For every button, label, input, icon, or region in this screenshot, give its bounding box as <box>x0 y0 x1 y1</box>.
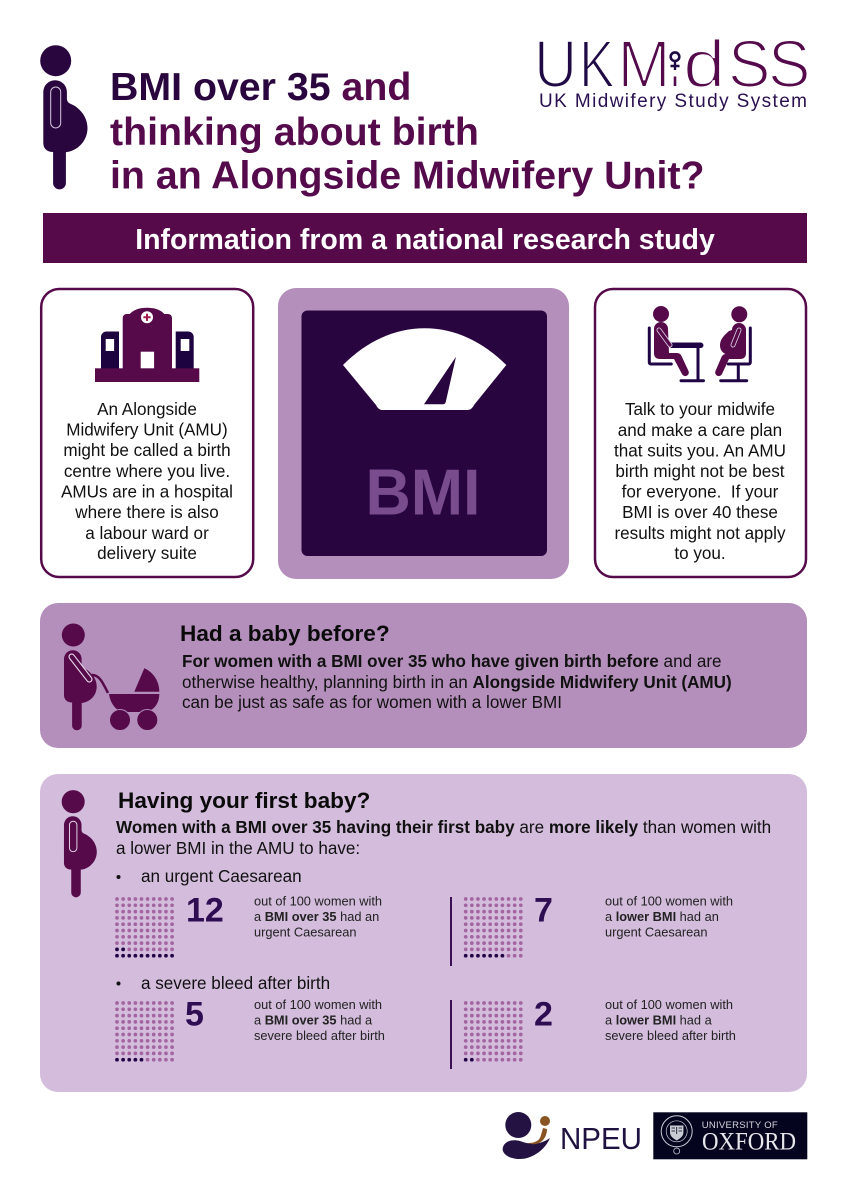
text: had a baby before: For women with a BMI over 35 who have given birth before and are <box>182 652 722 671</box>
caption <box>254 997 385 1043</box>
stat: 5 out of 100 with BMI over 35 severe bleed <box>117 996 385 1060</box>
text: AMU description: An Alongside <box>97 400 197 419</box>
title <box>110 65 705 198</box>
dot grid: 2 of 100 <box>466 1003 521 1060</box>
title: in an Alongside Midwifery Unit? <box>110 154 705 198</box>
logo: UKMidSS: K <box>579 26 615 101</box>
icon: pregnant woman <box>62 790 97 897</box>
title: thinking about birth <box>110 110 479 154</box>
icon: dial needle <box>424 357 456 404</box>
logo: UKMidSS: UK Midwifery Study System <box>539 91 808 112</box>
panel: had a baby before <box>40 603 807 748</box>
text: talk to your midwife: BMI is over 40 these <box>622 503 778 522</box>
caption: urgent Caesarean <box>605 924 707 940</box>
logo: UKMidSS: d <box>683 27 725 102</box>
icon: pregnant woman <box>40 45 88 189</box>
text: talk to your midwife <box>614 400 786 563</box>
logo: NPEU <box>503 1112 642 1159</box>
stat: 12 out of 100 with BMI over 35 urgent Caesarean <box>117 892 382 956</box>
logo: University of Oxford <box>653 1112 807 1159</box>
crest <box>661 1116 692 1154</box>
panel: having your first baby <box>40 774 807 1092</box>
text: AMU description: Midwifery Unit (AMU) <box>66 420 228 440</box>
text: AMU description: might be called a birth <box>63 441 231 460</box>
stat: 7 out of 100 with lower BMI urgent Caesarean <box>451 892 733 966</box>
text: talk to your midwife: birth might not be best <box>615 462 785 481</box>
dot grid: 5 of 100 <box>117 1003 172 1060</box>
caption <box>254 894 382 940</box>
bullet: severe bleed: a severe bleed after birth <box>141 974 330 993</box>
panel: what is an AMU <box>41 289 253 577</box>
logo: UKMidSS: U <box>534 28 577 102</box>
caption: out of 100 women with <box>605 894 733 908</box>
caption: out of 100 women with <box>254 997 382 1012</box>
banner: information from a national research study <box>43 213 807 263</box>
bullet: urgent Caesarean: an urgent Caesarean <box>141 867 302 886</box>
number: 2: 2 <box>534 996 553 1034</box>
caption: out of 100 women with <box>605 997 733 1012</box>
text: had a baby before: otherwise healthy, planning birth in an Alongside Midwifery Unit (AMU) <box>182 673 732 692</box>
panel: BMI scales <box>278 288 569 579</box>
text: talk to your midwife: to you. <box>674 544 726 563</box>
text: had a baby before: can be just as safe as for women with a lower BMI <box>182 693 562 712</box>
number: 7: 7 <box>534 892 553 930</box>
caption: a lower BMI had an <box>605 909 719 924</box>
icon: hospital <box>95 308 199 382</box>
heading: having your first baby: Having your first baby? <box>118 788 370 813</box>
caption <box>605 894 733 940</box>
text: AMU description: where there is also <box>74 503 219 522</box>
number: 5: 5 <box>185 996 204 1034</box>
text: AMU description: centre where you live. <box>64 462 230 481</box>
caption: a BMI over 35 had an <box>254 909 379 924</box>
dot grid: 7 of 100 <box>466 899 521 956</box>
logo: UKMidSS: M <box>618 27 671 101</box>
dot grid: 12 of 100 <box>117 899 172 956</box>
text: talk to your midwife: that suits you. An AMU <box>614 442 786 460</box>
text: talk to your midwife: Talk to your midwife <box>625 400 775 419</box>
text: AMU description: a labour ward or <box>85 524 209 543</box>
text: talk to your midwife: for everyone. If your <box>622 482 779 502</box>
text: more likely intro <box>116 818 771 858</box>
logo: University of Oxford: UNIVERSITY OF <box>702 1120 778 1131</box>
text: talk to your midwife: results might not apply <box>614 524 786 543</box>
logo: UKMidSS <box>534 26 810 112</box>
logo: UKMidSS: S <box>728 27 770 101</box>
text: more likely intro: Women with a BMI over 35 having their first baby are more likely than women with <box>116 818 771 837</box>
icon: midwife and woman talking <box>649 306 750 381</box>
text: AMU description: AMUs are in a hospital <box>61 482 233 502</box>
text: had a baby before <box>182 652 732 712</box>
caption: severe bleed after birth <box>254 1028 385 1043</box>
number: 12: 12 <box>186 892 224 930</box>
logo: UKMidSS: S <box>768 27 810 101</box>
stat: 2 out of 100 with lower BMI severe bleed <box>451 996 736 1069</box>
caption: a lower BMI had a <box>605 1012 713 1028</box>
caption: a BMI over 35 had a <box>254 1012 373 1028</box>
heading: had a baby before: Had a baby before? <box>180 621 390 646</box>
BMI label: BMI <box>366 455 480 528</box>
panel: talk to your midwife <box>595 289 806 577</box>
icon: woman with pram <box>62 624 159 730</box>
caption <box>605 997 736 1043</box>
text: AMU description: delivery suite <box>97 544 197 563</box>
caption: urgent Caesarean <box>254 924 356 940</box>
caption: severe bleed after birth <box>605 1028 736 1043</box>
text: more likely intro: a lower BMI in the AMU to have: <box>116 839 360 858</box>
logo: NPEU: NPEU <box>560 1121 642 1156</box>
text: AMU description <box>61 400 233 563</box>
logo: University of Oxford: OXFORD <box>702 1128 796 1155</box>
title: BMI over 35 and <box>110 65 411 109</box>
text: talk to your midwife: and make a care plan <box>618 421 782 440</box>
caption: out of 100 women with <box>254 894 382 908</box>
banner: information from a national research study: Information from a national research study <box>135 224 715 256</box>
icon: scale dial <box>343 328 506 410</box>
